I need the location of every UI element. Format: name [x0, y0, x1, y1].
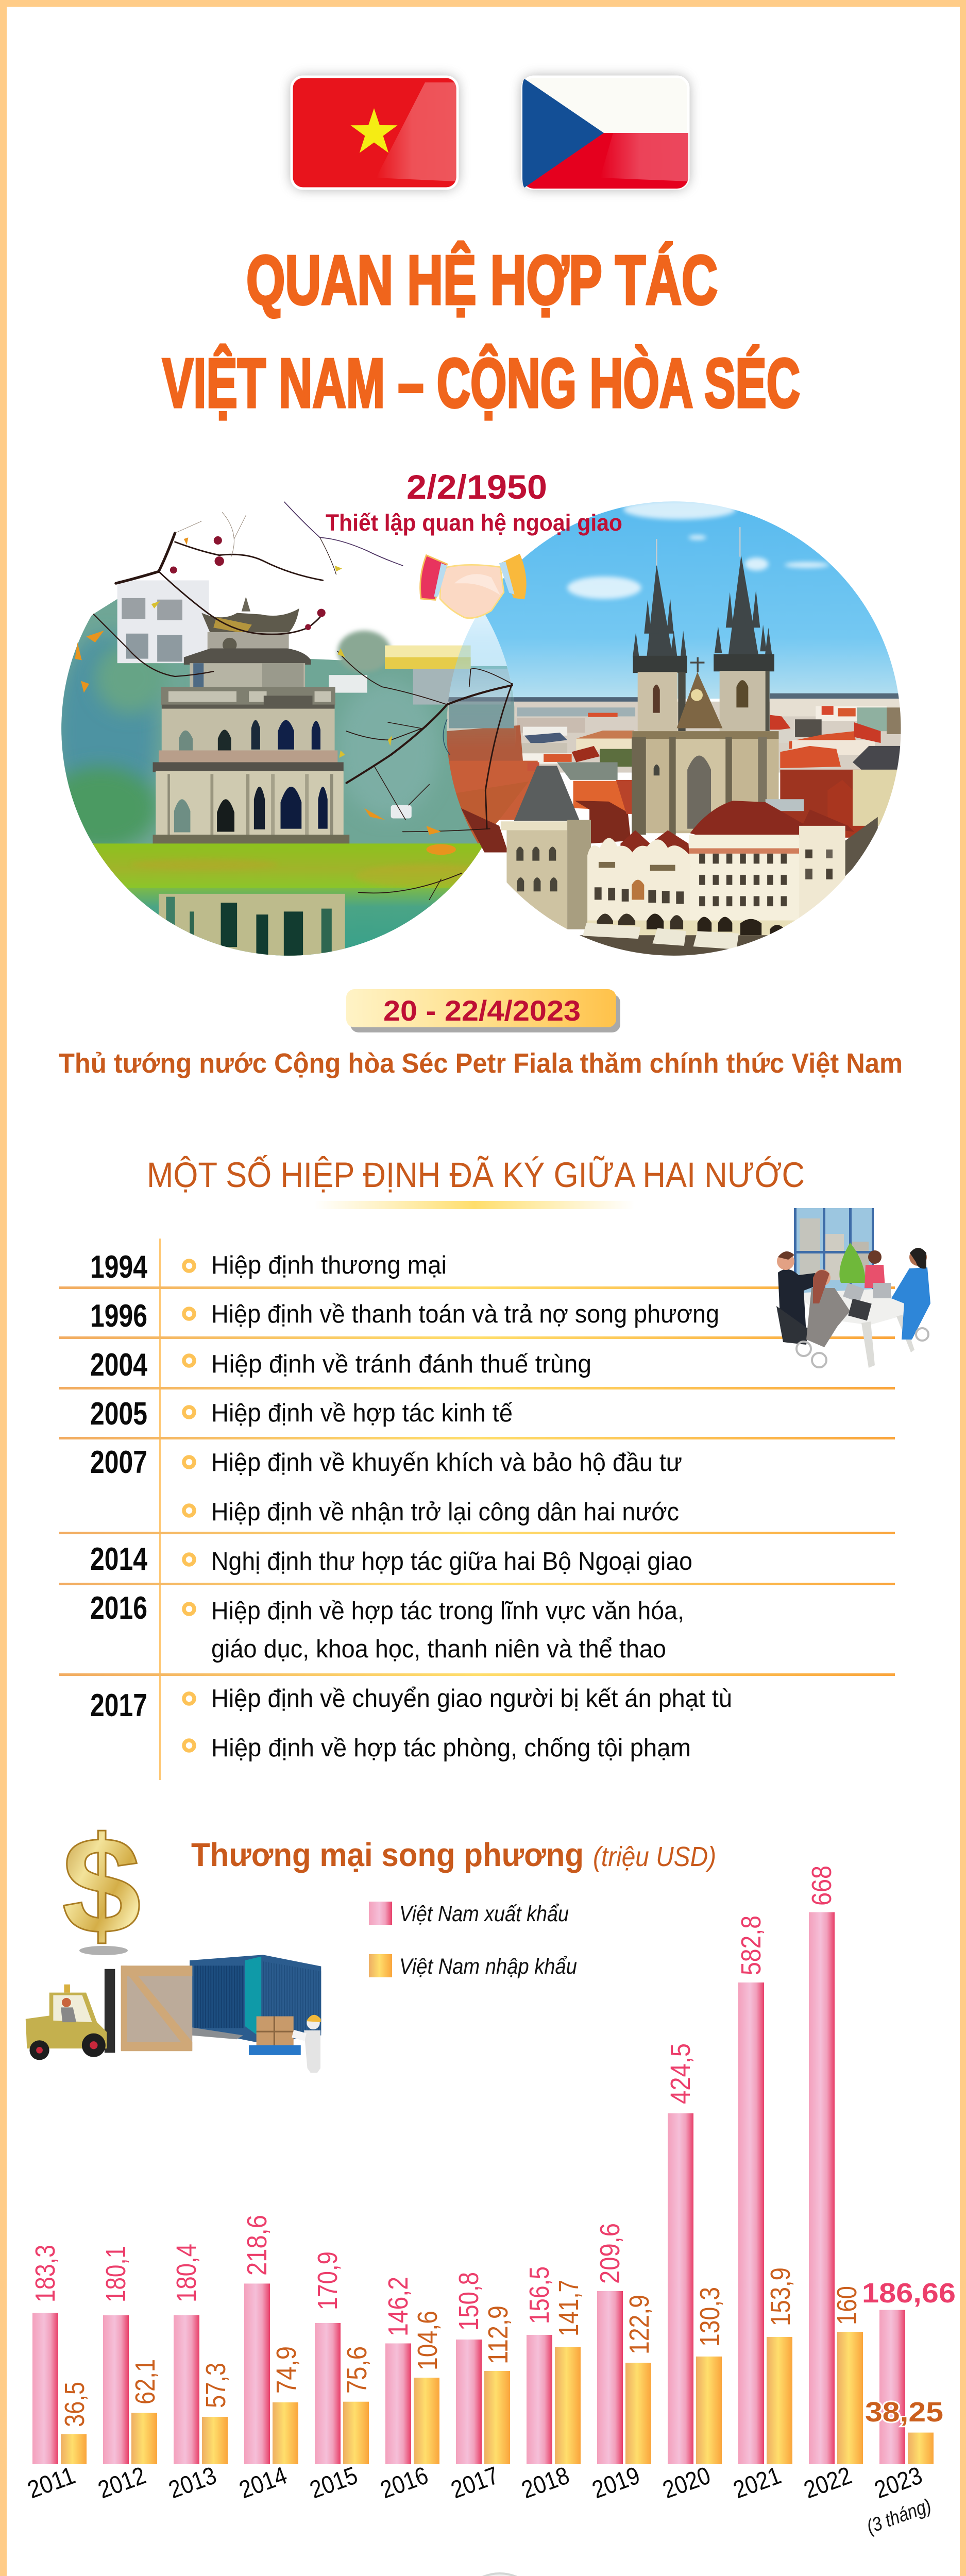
agreements table: Hiệp định về tránh đánh thuế trùng [211, 1350, 591, 1378]
chart legend: Việt Nam nhập khẩu [399, 1954, 577, 1979]
icon: gold dollar sign: $ [62, 1808, 141, 1962]
bars 2018: 156,5 [524, 2266, 555, 2324]
flag: Vietnam [292, 77, 457, 189]
far right building [853, 746, 902, 771]
bars 2017: 2017 [448, 2462, 502, 2504]
far city [448, 697, 638, 702]
background buildings [117, 580, 209, 663]
bars 2011 [24, 2245, 90, 2504]
agreements table: Hiệp định về thanh toán và trả nợ song phương [211, 1300, 719, 1328]
agreements table: Nghị định thư hợp tác giữa hai Bộ Ngoại giao [211, 1548, 692, 1575]
bars 2014 [236, 2215, 302, 2504]
chart heading: Thương mại song phương [191, 1836, 584, 1873]
panel: Vietnam export goods [21, 2573, 964, 2576]
tree branches over the photos [94, 502, 512, 900]
bars 2016: 104,6 [412, 2311, 443, 2370]
agreements table: Hiệp định về chuyển giao người bị kết án phạt tù [211, 1685, 732, 1713]
bars 2023: (3 tháng) [864, 2495, 934, 2538]
bars 2015 [307, 2251, 372, 2504]
bars 2018: 141,7 [553, 2280, 584, 2336]
agreements table: Hiệp định về khuyến khích và bảo hộ đầu tư [211, 1449, 682, 1477]
blossoms and yellow leaves on branches [75, 536, 456, 855]
bars 2014: 74,9 [271, 2346, 302, 2394]
bars 2012: 2012 [95, 2462, 149, 2504]
bars 2022: 2022 [801, 2462, 855, 2504]
bars 2015: 75,6 [342, 2346, 372, 2394]
grass [93, 843, 482, 894]
bars 2021: 2021 [730, 2462, 785, 2504]
agreements table: 1996 [90, 1298, 147, 1334]
chart legend [369, 1902, 577, 1979]
bars 2020: 424,5 [665, 2043, 696, 2104]
agreements table: Hiệp định về hợp tác trong lĩnh vực văn hóa, [211, 1597, 684, 1625]
flag: Czech Republic [522, 77, 688, 189]
bars 2022: 668 [806, 1866, 837, 1906]
section heading: agreements [147, 1155, 805, 1209]
bars 2019: 209,6 [595, 2223, 625, 2284]
bars 2020: 130,3 [694, 2287, 725, 2347]
bar chart: bilateral trade [24, 1866, 956, 2538]
bars 2023: 186,66 [862, 2278, 956, 2309]
bars 2011: 183,3 [30, 2245, 61, 2302]
date of establishing relations: Thiết lập quan hệ ngoại giao [326, 510, 622, 536]
tower house with pyramid roof [514, 766, 580, 821]
bars 2017: 112,9 [483, 2306, 514, 2364]
section heading: agreements: MỘT SỐ HIỆP ĐỊNH ĐÃ KÝ GIỮA HAI NƯỚC [147, 1155, 805, 1195]
date of establishing relations [326, 468, 622, 536]
photo: Hoan Kiem turtle tower [61, 580, 516, 956]
bars 2023: 2023 [871, 2462, 926, 2504]
photo: Prague Tyn church and old town [443, 495, 916, 962]
bars 2011: 2011 [24, 2462, 79, 2504]
agreements table: Hiệp định về hợp tác kinh tế [211, 1399, 513, 1427]
water and reflection [127, 888, 450, 956]
left gabled house [620, 830, 690, 867]
title: QUAN HỆ HỢP TÁC [246, 241, 718, 319]
bars 2017: 150,8 [453, 2272, 484, 2331]
date of establishing relations: 2/2/1950 [406, 468, 547, 506]
bars 2011: 36,5 [59, 2382, 90, 2427]
visit description: Thủ tướng nước Cộng hòa Séc Petr Fiala thăm chính thức Việt Nam [59, 1048, 903, 1079]
bars 2013: 2013 [165, 2462, 220, 2504]
bars 2022 [801, 1866, 863, 2504]
bars 2021: 582,8 [736, 1916, 767, 1975]
chart legend: Việt Nam xuất khẩu [399, 1902, 569, 1926]
arcade and awnings [587, 921, 800, 938]
bars 2012: 180,1 [100, 2246, 131, 2302]
agreements table: Hiệp định về nhận trở lại công dân hai nước [211, 1498, 679, 1526]
bars 2020: 2020 [659, 2462, 714, 2504]
visit date badge: 20 - 22/4/2023 [383, 994, 581, 1027]
bars 2019: 122,9 [624, 2295, 655, 2354]
church towers [633, 656, 687, 673]
bars 2015: 170,9 [312, 2251, 343, 2310]
bars 2019: 2019 [589, 2462, 643, 2504]
left roofs [443, 761, 538, 820]
bars 2018: 2018 [518, 2462, 573, 2504]
agreements table: 2007 [90, 1445, 147, 1480]
bars 2023 [862, 2278, 956, 2538]
agreements table: Hiệp định thương mại [211, 1251, 447, 1279]
church body [632, 731, 778, 833]
bars 2015: 2015 [307, 2462, 361, 2504]
agreements table: giáo dục, khoa học, thanh niên và thể thao [211, 1635, 666, 1663]
agreements table: 2005 [90, 1396, 147, 1432]
bars 2013: 57,3 [200, 2363, 231, 2408]
title [162, 241, 800, 422]
icon: biscuits [455, 2573, 545, 2576]
clouds [567, 499, 829, 599]
central gabled house [690, 801, 807, 842]
church spires [633, 555, 772, 659]
agreements table: 2014 [90, 1541, 147, 1577]
foliage backdrop [57, 598, 530, 855]
agreements table [59, 1239, 895, 1780]
agreements table: 2017 [90, 1688, 147, 1723]
bars 2017 [448, 2272, 514, 2504]
bars 2020 [659, 2043, 725, 2504]
icon: handshake [420, 554, 527, 618]
bars 2019 [589, 2223, 655, 2504]
visit date badge [346, 989, 620, 1032]
agreements table: 2004 [90, 1347, 147, 1383]
agreements table: Hiệp định về hợp tác phòng, chống tội phạm [211, 1734, 691, 1762]
bars 2016 [377, 2277, 443, 2504]
bars 2012 [95, 2246, 161, 2504]
red roof cluster right [780, 770, 875, 835]
bars 2012: 62,1 [130, 2359, 161, 2404]
agreements table: 1994 [90, 1249, 147, 1285]
bars 2021: 153,9 [765, 2267, 796, 2326]
chart heading: (triệu USD) [593, 1841, 716, 1872]
bars 2014: 218,6 [242, 2215, 273, 2276]
bars 2014: 2014 [236, 2462, 291, 2504]
agreements table: 2016 [90, 1590, 147, 1626]
bars 2016: 2016 [377, 2462, 432, 2504]
icon: forklift and shipping container [26, 1955, 321, 2073]
bars 2021 [730, 1916, 796, 2504]
bars 2016: 146,2 [383, 2277, 414, 2336]
bars 2023: 38,25 [865, 2397, 943, 2428]
icon: business meeting [776, 1208, 930, 1368]
bars 2013 [165, 2244, 231, 2504]
bars 2022: 160 [832, 2286, 862, 2325]
bars 2013: 180,4 [171, 2244, 202, 2302]
tower [242, 597, 250, 612]
bars 2018 [518, 2266, 584, 2504]
